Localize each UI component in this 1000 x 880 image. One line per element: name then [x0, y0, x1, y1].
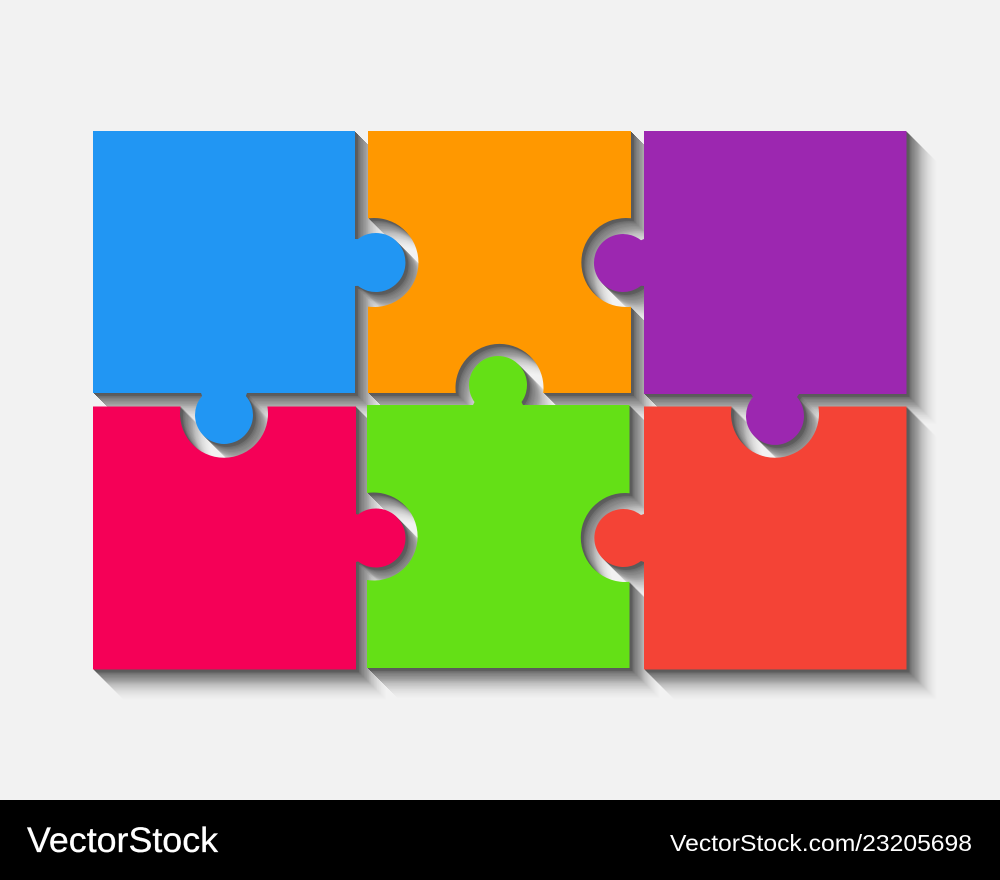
- puzzle piece: green: [367, 356, 630, 668]
- puzzle piece: red: [594, 406, 906, 670]
- footer image id text: VectorStock.com/23205698: [670, 830, 972, 856]
- footer logo text: VectorStock: [27, 821, 219, 860]
- stepped drop shadows of puzzle pieces: [94, 132, 936, 700]
- puzzle piece: orange: [368, 131, 631, 393]
- footer bar: [0, 800, 1000, 880]
- puzzle piece: purple: [594, 131, 906, 445]
- puzzle piece: pink: [93, 406, 405, 670]
- puzzle piece: blue: [93, 131, 405, 444]
